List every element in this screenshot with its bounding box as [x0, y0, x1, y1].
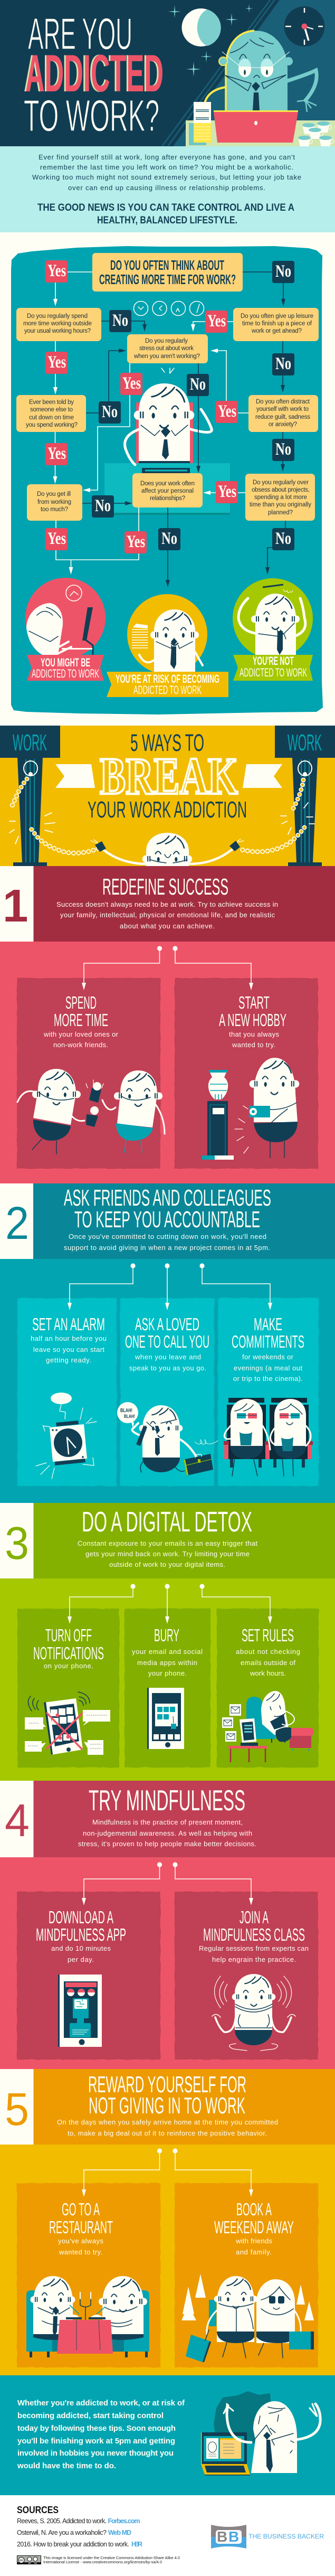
question box: leisure time [233, 308, 319, 341]
no badges: No [275, 354, 291, 373]
panel: section 1 body [0, 942, 335, 1183]
question box: relationships [132, 473, 203, 507]
text block: conclusion: you'll be finishing work at 5pm and getting [17, 2437, 175, 2446]
card: set an alarm: half an hour before you [31, 1334, 107, 1342]
text block: intro paragraph: over can end up causing illness or relationship problems. [68, 184, 265, 192]
text block: conclusion [17, 2399, 185, 2470]
outcome: might be addicted [25, 578, 106, 681]
card: ask a loved one: ASK A LOVED [135, 1314, 199, 1334]
text block: non-judgemental awareness. As well as helping with [83, 1829, 252, 1837]
illustration: laptop [201, 2432, 250, 2476]
panel: footer sources [0, 2495, 335, 2576]
title [24, 9, 164, 140]
text block: conclusion: involved in hobbies you never thought you [17, 2449, 174, 2458]
text block: licence: This image is licensed under the Creative Commons Attribution-Share Alike 4.0 [43, 2555, 180, 2560]
card: spend more time: non-work friends. [53, 1041, 108, 1049]
card: download an app: per day. [68, 1955, 94, 1963]
text block: On the days when you safely arrive home at the time you committed [57, 2118, 278, 2126]
text block: references: Web MD [108, 2529, 131, 2536]
question box: relationships: Does your work often [140, 481, 195, 487]
heading: 5 ways to break: 5 WAYS TO [130, 729, 204, 756]
question box: ill: Do you get ill [37, 491, 71, 497]
panel: section 5 reward [0, 2069, 335, 2145]
card: bury: media apps within [137, 1659, 197, 1667]
yes badges: Yes [47, 529, 66, 548]
panel: section 3 digital detox [0, 1503, 335, 1578]
no badges: No [275, 262, 291, 281]
card: start a new hobby: that you always [229, 1030, 280, 1038]
illustration: couple with luggage [186, 2276, 314, 2362]
illustration: couple at the cinema [224, 1398, 313, 1476]
card: make commitments: for weekends or [242, 1353, 294, 1361]
card: make commitments: or trip to the cinema). [233, 1375, 303, 1383]
card: turn off notifications: TURN OFF [45, 1625, 92, 1645]
text block: support to avoid giving in when a new project comes in at 5pm. [64, 1244, 270, 1252]
card: spend more time: SPEND [65, 993, 97, 1012]
card: ask a loved one [117, 1314, 218, 1475]
no badges: No [95, 496, 111, 515]
card: set an alarm [31, 1314, 107, 1479]
panel: section 2 accountable [0, 1183, 335, 1259]
text block: references [17, 2517, 142, 2548]
question box: distraction: Do you often distract [256, 399, 310, 405]
heading: good news: THE GOOD NEWS IS YOU CAN TAKE CONTROL AND LIVE A [37, 202, 294, 213]
text block [78, 1539, 257, 1568]
text block: licence: International License - www.creativecommons.org/licenses/by-sa/4.0 [43, 2560, 162, 2564]
decorative clocks [134, 301, 204, 316]
card: book a weekend away [181, 2199, 314, 2362]
question box: obsess: obsess about projects, [252, 487, 310, 493]
card: go to a restaurant [26, 2199, 149, 2357]
heading: good news: HEALTHY, BALANCED LIFESTYLE. [97, 215, 237, 226]
illustration: phone with notifications crossed out [25, 1692, 110, 1755]
card: download an app: MINDFULNESS APP [36, 1925, 126, 1944]
title: ARE YOU [28, 9, 132, 59]
card: join a class: JOIN A [240, 1907, 269, 1927]
card: join a class: help engrain the practice. [212, 1955, 296, 1963]
icon: wall clock [284, 6, 325, 46]
card: start a new hobby: wanted to try. [232, 1041, 275, 1049]
text block: references: Osterwil, N. Are you a workaholic? [17, 2529, 107, 2536]
outcome: not addicted [233, 578, 313, 681]
question box: stress: Do you regularly [145, 338, 188, 344]
text block: conclusion: Whether you're addicted to work, or at risk of [17, 2399, 185, 2408]
text block: Constant exposure to your emails is an easy trigger that [78, 1539, 257, 1547]
icon: creative commons badge: cc [20, 2559, 23, 2562]
illustration: happy man [224, 2401, 320, 2473]
connector arrows [82, 946, 253, 990]
connector arrows [68, 1263, 272, 1310]
yes badges: Yes [127, 532, 145, 551]
banner: not addicted: YOU'RE NOT [253, 654, 294, 667]
question box: distraction: or anxiety? [269, 421, 297, 428]
question box: stress [127, 334, 208, 363]
card: book a weekend away: and family. [236, 2248, 272, 2256]
card: start a new hobby [202, 993, 299, 1160]
panel: section 3 body [0, 1578, 335, 1781]
text block: references: HBR [131, 2541, 142, 2548]
banner: at risk: ADDICTED TO WORK [133, 683, 202, 697]
card: go to a restaurant: RESTAURANT [49, 2217, 113, 2237]
illustration: meditating man [212, 1974, 295, 2051]
question box: told to cut down: you spend working? [26, 422, 78, 428]
question box: obsess: time than you originally [250, 502, 311, 508]
text block: about what you can achieve. [120, 922, 215, 930]
panel: section 4 mindfulness [0, 1781, 335, 1857]
icon: creative commons badge [17, 2555, 41, 2564]
card: set an alarm: SET AN ALARM [32, 1314, 105, 1334]
question box: distraction: yourself with work to [256, 406, 309, 412]
card: go to a restaurant: GO TO A [62, 2199, 100, 2219]
question box: main question [92, 253, 243, 292]
number 3: 3 [5, 1518, 29, 1569]
logo: the business backer: THE BUSINESS BACKER [248, 2533, 324, 2540]
question box: leisure time: time to finish up a piece of [242, 321, 312, 327]
illustration: confused worker [125, 368, 212, 474]
banner: at risk [107, 672, 228, 697]
card: make commitments [224, 1314, 313, 1476]
illustration: phone with buried apps [147, 1688, 184, 1749]
text block: references: Reeves, S. 2005. Addicted to work. [17, 2517, 107, 2525]
question box: obsess: planned? [268, 510, 293, 516]
connector arrows [82, 1862, 253, 1905]
card: bury: BURY [154, 1625, 179, 1645]
card: bury: your email and social [132, 1648, 203, 1656]
question box: obsess [245, 474, 315, 521]
question box: outside hours: Do you regularly spend [27, 313, 88, 319]
heading: sources: SOURCES [17, 2505, 59, 2515]
icon: creative commons badge: BY [28, 2562, 32, 2564]
yes badges: Yes [207, 312, 226, 331]
question box: told to cut down: someone else to [30, 407, 73, 413]
no badges: No [190, 375, 206, 394]
card: bury [132, 1625, 203, 1749]
question box: relationships: affect your personal [141, 488, 194, 494]
card: turn off notifications: on your phone. [44, 1662, 93, 1670]
illustration: mindfulness app on phone [58, 1975, 102, 2047]
text block: to, make a big deal out of it to reinforce the positive behavior. [68, 2129, 267, 2137]
illustration: couple at a restaurant [26, 2276, 149, 2357]
heading: REDEFINE SUCCESS [102, 874, 228, 900]
text block: intro paragraph [32, 153, 301, 192]
panel: section 2 body [0, 1259, 335, 1503]
card: ask a loved one: speak to you as you go. [129, 1364, 206, 1372]
logo: the business backer: B [228, 2528, 239, 2545]
text block [57, 2118, 278, 2137]
card: set rules: about not checking [236, 1648, 300, 1656]
heading [88, 2072, 246, 2119]
card: join a class [199, 1907, 309, 2051]
card: spend more time [17, 993, 165, 1154]
illustration: vase on pedestal and photographer [202, 1058, 299, 1160]
connector arrows [82, 2148, 253, 2197]
card: download an app: and do 10 minutes [51, 1944, 111, 1952]
text block: intro paragraph: remember the last time you left work on time? You might be a workaholic. [40, 163, 293, 171]
illustration: desk behind the flowchart [104, 463, 230, 515]
connectors: white yes paths [53, 272, 248, 575]
illustration: man on phone with briefcase: BLAH! [120, 1408, 132, 1414]
card: go to a restaurant: you've always [58, 2237, 103, 2245]
question box: main question: CREATING MORE TIME FOR WORK? [99, 271, 236, 287]
panel: flowchart [11, 246, 323, 714]
number 5: 5 [5, 2084, 29, 2135]
card: set rules: work hours. [250, 1669, 286, 1677]
card: spend more time: MORE TIME [54, 1010, 108, 1030]
logo: the business backer: B [217, 2528, 227, 2545]
text block: intro paragraph: Ever find yourself still at work, long after everyone has gone, and you can't [39, 153, 295, 161]
banner: at risk: YOU'RE AT RISK OF BECOMING [116, 672, 219, 685]
number 2: 2 [5, 1198, 29, 1249]
question box: told to cut down: Ever been told by [29, 399, 74, 406]
card: download an app: DOWNLOAD A [49, 1907, 113, 1927]
card: make commitments: MAKE [254, 1314, 282, 1334]
question box: told to cut down: cut down on time [29, 415, 74, 421]
illustration: man on phone with briefcase [117, 1402, 218, 1475]
card: book a weekend away: BOOK A [236, 2199, 272, 2219]
question box: told to cut down [16, 395, 86, 432]
no badges: No [275, 440, 291, 459]
title: ADDICTED [24, 44, 162, 102]
question box: leisure time: Do you often give up leisure [241, 313, 313, 319]
no badges: No [161, 529, 177, 548]
text block: outside of work to your digital items. [109, 1560, 225, 1568]
text block: stress, it's proven to help people make better decisions. [78, 1840, 256, 1848]
heading [64, 1185, 271, 1233]
yes badges [45, 260, 238, 553]
yes badges: Yes [47, 353, 66, 372]
illustration: overworked man [205, 31, 317, 112]
heading: 5 ways to break [55, 729, 282, 823]
illustration: splat [214, 2391, 272, 2443]
illustration: man reading in an armchair [222, 1691, 314, 1762]
card: turn off notifications [25, 1625, 110, 1755]
title: TO WORK? [24, 91, 159, 140]
card: ask a loved one: when you leave and [135, 1353, 201, 1361]
text block: licence [43, 2555, 180, 2564]
banner: not addicted [233, 654, 313, 681]
yes badges: Yes [47, 261, 66, 280]
text block: intro paragraph: Working too much might not sound extremely serious, but letting your job take [32, 173, 301, 181]
no badges [92, 261, 294, 550]
panel: section 1 redefine success [0, 866, 335, 942]
question box: main question: DO YOU OFTEN THINK ABOUT [110, 257, 224, 273]
question box: ill: too much? [41, 506, 68, 513]
panel: introduction [0, 146, 335, 232]
banner: might be addicted: ADDICTED TO WORK [32, 667, 99, 680]
card: set an alarm: leave so you can start [33, 1346, 104, 1353]
heading: good news [37, 202, 294, 226]
panel: conclusion [0, 2375, 335, 2495]
yes badges: Yes [47, 444, 66, 463]
question box: obsess: Do you regularly over [253, 480, 309, 486]
card: join a class: Regular sessions from experts can [199, 1944, 309, 1952]
question box: stress: stress out about work [139, 345, 194, 352]
text block: conclusion: would have the time to do. [17, 2461, 116, 2470]
question box: ill [27, 484, 82, 521]
connectors: navy no paths [82, 272, 285, 587]
card: make commitments: evenings (a meal out [234, 1364, 302, 1372]
card: go to a restaurant: wanted to try. [59, 2248, 102, 2256]
no badges: No [112, 311, 128, 330]
illustration: friends toasting [17, 1069, 165, 1154]
illustration: desk [186, 120, 335, 147]
number 1: 1 [3, 880, 28, 932]
question box: outside hours [16, 308, 101, 341]
text block: Mindfulness is the practice of present moment, [92, 1818, 243, 1826]
card: set an alarm: getting ready. [46, 1356, 91, 1364]
panel: 5 ways banner [0, 726, 335, 870]
panel: section 5 body [0, 2145, 335, 2375]
panel: section 4 body [0, 1857, 335, 2069]
illustration: laptop and paper stack [194, 102, 298, 143]
yes badges: Yes [218, 402, 236, 421]
illustration: man on phone with briefcase: BLAH! [124, 1414, 135, 1419]
card: turn off notifications: NOTIFICATIONS [33, 1643, 104, 1663]
panel: hero header [0, 0, 335, 147]
card: set rules: emails outside of [241, 1659, 295, 1667]
pillar: left: WORK [13, 730, 47, 756]
card: bury: your phone. [148, 1669, 187, 1677]
text block: conclusion: becoming addicted, start taking control [17, 2411, 164, 2420]
banner: might be addicted [27, 655, 104, 681]
number 4: 4 [5, 1795, 30, 1846]
no badges: No [275, 529, 291, 548]
icon: ringing alarm clock [36, 1393, 97, 1479]
illustration: chains [9, 761, 314, 853]
text block: references: 2016. How to break your addiction to work. [17, 2541, 129, 2548]
text block: your family, intellectual, physical or emotional life, and be realistic [60, 911, 275, 919]
question box: distraction [248, 395, 318, 432]
card: ask a loved one: ONE TO CALL YOU [125, 1332, 209, 1351]
question box: leisure time: work or get ahead? [251, 328, 302, 334]
question box: outside hours: more time working outside [23, 321, 92, 327]
no badges: No [102, 402, 118, 421]
card: download an app [36, 1907, 126, 2047]
text block: references: Forbes.com [108, 2517, 140, 2525]
outcome: at risk [107, 594, 228, 697]
pillar: right [275, 726, 335, 866]
text block: conclusion: today by following these tips. Soon enough [17, 2424, 176, 2433]
question box: outside hours: your usual working hours? [24, 328, 91, 334]
pillar: left [0, 726, 60, 866]
question box: relationships: relationships? [150, 495, 185, 502]
heading: 5 ways to break: BREAK [100, 747, 238, 805]
text block [78, 1818, 256, 1848]
banner: might be addicted: YOU MIGHT BE [41, 656, 90, 669]
card: book a weekend away: with friends [235, 2237, 272, 2245]
illustration: man breaking free [91, 833, 244, 870]
logo: the business backer [211, 2525, 324, 2549]
icon: moon and stars [168, 4, 253, 77]
card: set rules [222, 1625, 314, 1762]
question box: distraction: reduce guilt, sadness [255, 414, 310, 420]
yes badges: Yes [218, 482, 236, 501]
illustration: trees [181, 2274, 314, 2320]
card: start a new hobby: START [238, 993, 270, 1012]
question box: ill: from working [37, 499, 71, 505]
text block: Once you've committed to cutting down on work, you'll need [69, 1233, 266, 1240]
text block [56, 900, 278, 930]
text block: gets your mind back on work. Try limiting your time [85, 1550, 250, 1558]
card: spend more time: with your loved ones or [43, 1030, 119, 1038]
icon: creative commons badge: SA [34, 2562, 37, 2564]
connector arrows [68, 1584, 272, 1624]
text block: Success doesn't always need to be at work. Try to achieve success in [56, 900, 278, 908]
title: ADDICTED [25, 44, 164, 102]
question box: obsess: spending a lot more [254, 494, 307, 501]
yes badges: Yes [122, 374, 141, 393]
text block [64, 1233, 270, 1252]
question box: stress: when you aren't working? [133, 353, 200, 360]
